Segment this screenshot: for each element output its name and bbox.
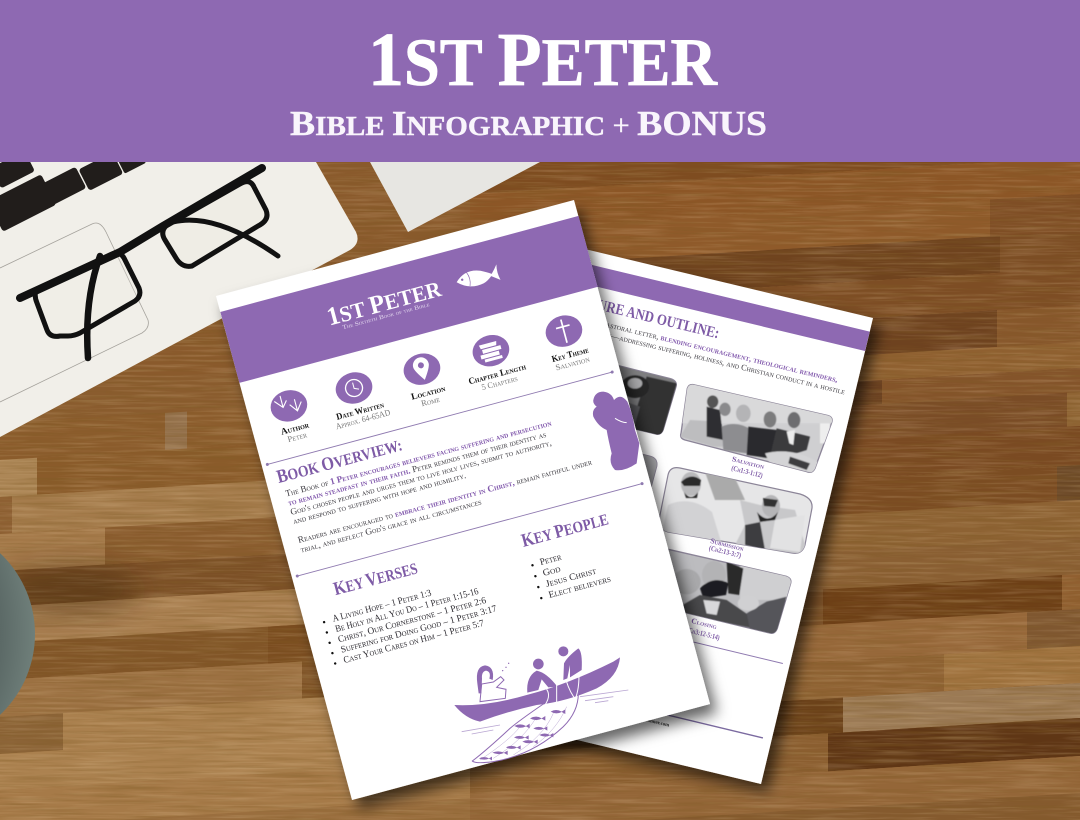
theme value: Salvation bbox=[554, 353, 591, 372]
boat hull bbox=[454, 657, 620, 722]
front page content bbox=[220, 216, 676, 673]
notebook bbox=[370, 162, 540, 232]
location label: Location bbox=[410, 383, 447, 402]
banner subtitle: BIBLE INFOGRAPHIC + BONUS bbox=[290, 104, 767, 143]
heading: book overview: BOOK OVERVIEW: bbox=[274, 434, 404, 488]
location value: Rome bbox=[420, 394, 441, 408]
header band bbox=[220, 216, 598, 383]
back footer rule bbox=[538, 684, 763, 738]
glasses bbox=[20, 168, 278, 358]
date value: Approx. 64-65AD bbox=[335, 407, 391, 431]
icon: location pin bbox=[404, 354, 440, 385]
overview paragraph: Readers are encouraged to embrace their identity in Christ, remain faithful under bbox=[297, 457, 593, 545]
image: cross bbox=[618, 365, 677, 435]
key verses list: Be Holy in All You Do – 1 Peter 1:15-16 bbox=[334, 586, 480, 635]
chapter label: Chapter Length bbox=[467, 361, 527, 386]
caption: salvation: Salvation bbox=[731, 454, 766, 471]
overview paragraph: trial, and reflect God's grace in all circumstances bbox=[299, 497, 482, 555]
image: submission bbox=[659, 468, 812, 555]
key verses list bbox=[322, 588, 496, 665]
illustration: fishing boat and net bbox=[454, 646, 628, 763]
caption: salvation chapters: (Ch1:3-1:12) bbox=[731, 463, 764, 480]
page title: 1ST PETER bbox=[324, 273, 445, 331]
theme label: Key Theme bbox=[551, 345, 590, 364]
water lines bbox=[462, 690, 628, 734]
key people list: Jesus Christ bbox=[544, 566, 598, 590]
chapter value: 5 Chapters bbox=[480, 373, 519, 392]
back page band and text bbox=[437, 252, 870, 753]
caption: closing: Closing bbox=[690, 616, 718, 631]
icon: fish bbox=[456, 264, 500, 286]
front page bbox=[216, 200, 710, 800]
page subtitle: The Sixtieth Book of the Bible bbox=[342, 302, 431, 331]
overview paragraph: The Book of 1 Peter encourages believers facing suffering and persecution bbox=[284, 418, 553, 499]
back intro line 1: 1 Peter is written as a pastoral letter, blending encouragement, theological reminders, bbox=[524, 301, 839, 384]
caption: submission chapters: (Ch2:13-3:7) bbox=[708, 543, 743, 560]
overview paragraph: and respond to suffering with hope and humility. bbox=[292, 470, 467, 526]
mug bbox=[0, 523, 140, 745]
figure: fisherman standing bbox=[558, 646, 582, 680]
overview paragraph bbox=[285, 422, 592, 552]
footer credit: www.BiblePlanner.com bbox=[620, 712, 670, 729]
overview paragraph: God's chosen people and urges them to live holy lives, submit to authority, bbox=[289, 437, 553, 517]
banner title: 1ST PETER bbox=[368, 18, 718, 102]
figure: Jesus bbox=[477, 663, 509, 702]
key verses list: Suffering for Doing Good – 1 Peter 3:17 bbox=[340, 603, 498, 656]
net ropes over hull bbox=[543, 675, 579, 707]
back heading: STRUCTURE AND OUTLINE: bbox=[543, 281, 722, 343]
heading: key people: KEY PEOPLE bbox=[519, 508, 611, 552]
key verses list: A Living Hope – 1 Peter 1:3 bbox=[331, 588, 433, 625]
divider with dots bbox=[296, 482, 643, 577]
icon: books bbox=[472, 335, 510, 366]
banner bbox=[0, 0, 1080, 162]
back intro line 2: and exhortation—addressing suffering, holiness, and Christian conduct in a hostile bbox=[555, 318, 846, 396]
author label: Author bbox=[280, 419, 311, 437]
wood table background right bbox=[470, 162, 1080, 820]
icon: cross bbox=[546, 315, 582, 347]
caption: closing chapters: (Ch3:12-5:14) bbox=[686, 625, 721, 642]
key people list: Peter bbox=[539, 552, 563, 568]
key people list: Elect believers bbox=[547, 574, 612, 601]
image: partial middle bbox=[642, 454, 657, 488]
back divider bbox=[595, 618, 783, 664]
key verses list: Cast Your Cares on Him – 1 Peter 5:7 bbox=[342, 618, 485, 666]
caption: submission: Submission bbox=[710, 536, 745, 553]
image: crowd salvation bbox=[680, 383, 833, 473]
heading: key verses: KEY VERSES bbox=[331, 558, 420, 600]
divider with dots bbox=[266, 371, 613, 466]
image: closing bbox=[668, 548, 792, 634]
icon: author bbox=[270, 390, 308, 422]
fishing net bbox=[472, 693, 578, 763]
icon: praying woman silhouette bbox=[593, 392, 639, 470]
overview paragraph: to remain steadfast in their faith. Peter reminds them of their identity as bbox=[287, 429, 547, 508]
key verses list: Christ, Our Cornerstone – 1 Peter 2:6 bbox=[337, 595, 488, 645]
date label: Date Written bbox=[335, 399, 386, 422]
key people list bbox=[531, 556, 611, 600]
laptop bbox=[0, 150, 358, 437]
keyboard keys bbox=[0, 150, 146, 232]
figure: fisherman seated bbox=[527, 659, 557, 693]
back page bbox=[556, 250, 886, 800]
key people list: God bbox=[542, 564, 562, 579]
author value: Peter bbox=[286, 429, 308, 444]
icon: clock bbox=[336, 372, 372, 404]
